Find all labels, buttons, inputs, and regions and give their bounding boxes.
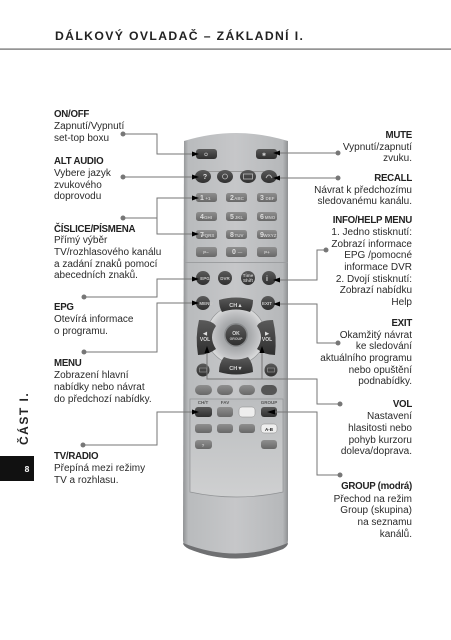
numeric keypad: WXYZ [264, 233, 277, 238]
text: RECALL: RECALL [374, 173, 412, 184]
text: VOL: hlasitosti nebo [348, 423, 412, 434]
power and mute buttons [196, 149, 277, 159]
text: INFO/HELP MENU: Help [391, 297, 412, 308]
navigation cluster: MENU [199, 301, 213, 306]
text: RECALL: sledovanému kanálu. [317, 196, 412, 207]
navigation cluster: VOL [262, 337, 272, 343]
navigation cluster: ◀ [202, 331, 207, 337]
text: EPG: EPG [54, 302, 74, 313]
text: ALT AUDIO: doprovodu [54, 191, 101, 202]
EPG DVR timeshift info buttons [196, 271, 276, 285]
lower flap panel [190, 399, 283, 497]
text: INFO/HELP MENU: Zobrazí informace [331, 239, 412, 250]
navigation cluster: ▶ [264, 331, 270, 337]
numeric keypad: ABC [234, 196, 245, 201]
text: INFO/HELP MENU: Zobrazí nabídku [340, 285, 412, 296]
text: ON/OFF [54, 109, 124, 144]
numeric keypad: 3 [260, 195, 264, 202]
text: VOL: pohyb kurzoru [349, 435, 412, 446]
lower panel buttons [195, 400, 277, 449]
text: MUTE: Vypnutí/zapnutí [343, 142, 412, 153]
numeric keypad: TUV [234, 233, 244, 238]
numeric keypad: P+ [264, 250, 270, 255]
navigation cluster: OK [232, 331, 240, 337]
power and mute buttons: ⏻ [204, 152, 208, 157]
text: EXIT: EXIT [391, 318, 412, 329]
text: TV/RADIO: Přepíná mezi režimy [54, 463, 145, 474]
numeric keypad: 9 [260, 232, 264, 239]
title: DÁLKOVÝ OVLADAČ – ZÁKLADNÍ I. [55, 28, 304, 43]
numeric keypad: 7 [200, 232, 204, 239]
lower panel buttons: FAV [221, 400, 229, 405]
remote body [183, 133, 288, 558]
text: ČÍSLICE/PÍSMENA: ČÍSLICE/PÍSMENA [54, 223, 136, 235]
numeric keypad: 2 [230, 195, 234, 202]
numeric keypad: +1 [205, 196, 211, 201]
numeric keypad: DEF [266, 196, 275, 201]
numeric keypad: MNO [265, 215, 276, 220]
text: MENU: MENU [54, 358, 82, 369]
text: GROUP: Group (skupina) [340, 505, 412, 516]
text: GROUP: Přechod na režim [334, 494, 412, 505]
page number tab: 8 [25, 464, 30, 474]
navigation cluster [196, 296, 278, 376]
leader lines and pointers: left [80, 132, 199, 448]
text: GROUP [334, 481, 412, 540]
numeric keypad: 6 [260, 214, 264, 221]
text: EXIT [320, 318, 412, 387]
text: INFO/HELP MENU: 2. Dvojí stisknutí: [336, 274, 412, 285]
text: ČÍSLICE/PÍSMENA: a zadání znaků pomocí [54, 258, 158, 270]
text: INFO/HELP MENU: informace DVR [344, 262, 412, 273]
text: VOL: VOL [393, 399, 412, 410]
numeric keypad: 0 [232, 249, 236, 256]
navigation cluster: CH▲ [229, 303, 243, 309]
lower panel buttons: GROUP [261, 400, 277, 405]
text: MUTE: zvuku. [383, 153, 412, 164]
text: ALT AUDIO [54, 156, 112, 202]
numeric keypad: 8 [230, 232, 234, 239]
text: ALT AUDIO: zvukového [54, 180, 102, 191]
EPG DVR timeshift info buttons: EPG [200, 276, 210, 281]
text: VOL: Nastavení [367, 411, 412, 422]
navigation cluster: EXIT [262, 301, 272, 306]
text: ON/OFF: Zapnutí/Vypnutí [54, 121, 124, 132]
navigation cluster: VOL [200, 337, 210, 343]
numeric keypad: — [238, 250, 243, 255]
text: ALT AUDIO: ALT AUDIO [54, 156, 104, 167]
text: INFO/HELP MENU [331, 215, 412, 308]
text: MENU: do předchozí nabídky. [54, 394, 152, 405]
text: TV/RADIO [54, 451, 145, 486]
text: EPG: o programu. [54, 326, 108, 337]
text: ON/OFF: ON/OFF [54, 109, 89, 120]
text: ČÍSLICE/PÍSMENA: abecedních znaků. [54, 269, 138, 281]
numeric keypad: 5 [230, 214, 234, 221]
EPG DVR timeshift info buttons: Shift [243, 278, 253, 283]
navigation cluster: CH▼ [229, 366, 243, 372]
text: RECALL: Návrat k předchozímu [314, 185, 412, 196]
EPG DVR timeshift info buttons: i [266, 276, 268, 283]
text: GROUP: GROUP (modrá) [341, 481, 412, 492]
numeric keypad: 4 [200, 214, 204, 221]
function buttons row [195, 170, 277, 183]
text: TV/RADIO: TV a rozhlasu. [54, 475, 118, 486]
navigation cluster: GROUP [230, 337, 243, 341]
text: GROUP: kanálů. [380, 528, 412, 540]
text: EPG: Otevírá informace [54, 314, 134, 325]
text: EPG [54, 302, 134, 337]
page number tab [0, 456, 34, 481]
section label: část I: ČÁST I. [16, 392, 31, 445]
text: MUTE: MUTE [386, 130, 413, 141]
EPG DVR timeshift info buttons: Time [243, 273, 254, 278]
text: GROUP: na seznamu [358, 517, 412, 528]
playback buttons row [195, 385, 277, 395]
text: ALT AUDIO: Vybere jazyk [54, 168, 112, 179]
numeric keypad: GHI [204, 215, 212, 220]
numeric keypad [196, 193, 277, 257]
remote control [183, 133, 288, 558]
text: RECALL [314, 173, 412, 207]
text: TV/RADIO: TV/RADIO [54, 451, 99, 462]
lower panel buttons: ? [202, 443, 205, 448]
text: VOL [341, 399, 412, 457]
text: INFO/HELP MENU: 1. Jedno stisknutí: [331, 227, 412, 238]
text: ČÍSLICE/PÍSMENA: TV/rozhlasového kanálu [54, 247, 161, 258]
text: ON/OFF: set-top boxu [54, 133, 109, 144]
text: MENU [54, 358, 152, 405]
text: MENU: nabídky nebo návrat [54, 382, 145, 393]
EPG DVR timeshift info buttons: DVR [220, 276, 230, 281]
text: ČÍSLICE/PÍSMENA: Přímý výběr [54, 235, 108, 246]
text: INFO/HELP MENU: EPG /pomocné [344, 250, 412, 261]
lower panel buttons: A-B [265, 427, 274, 432]
numeric keypad: P− [203, 250, 209, 255]
text: EXIT: podnabídky. [358, 376, 412, 387]
lower panel buttons: CH/T [198, 400, 208, 405]
text: VOL: doleva/doprava. [341, 446, 412, 457]
text: EXIT: nebo opuštění [349, 365, 412, 376]
text: INFO/HELP MENU: INFO/HELP MENU [333, 215, 412, 226]
numeric keypad: PQRS [202, 233, 214, 238]
text: MUTE [343, 130, 413, 164]
function buttons row: ? [203, 174, 207, 181]
text: EXIT: aktuálního programu [320, 353, 412, 364]
text: EXIT: Okamžitý návrat [340, 330, 412, 341]
numeric keypad: JKL [235, 215, 243, 220]
numeric keypad: 1 [200, 195, 204, 202]
power and mute buttons: ✱ [262, 152, 267, 157]
leader lines and pointers: right [204, 150, 342, 478]
text: EXIT: ke sledování [356, 341, 412, 352]
text: MENU: Zobrazení hlavní [54, 370, 129, 381]
text: ČÍSLICE/PÍSMENA [54, 223, 161, 281]
